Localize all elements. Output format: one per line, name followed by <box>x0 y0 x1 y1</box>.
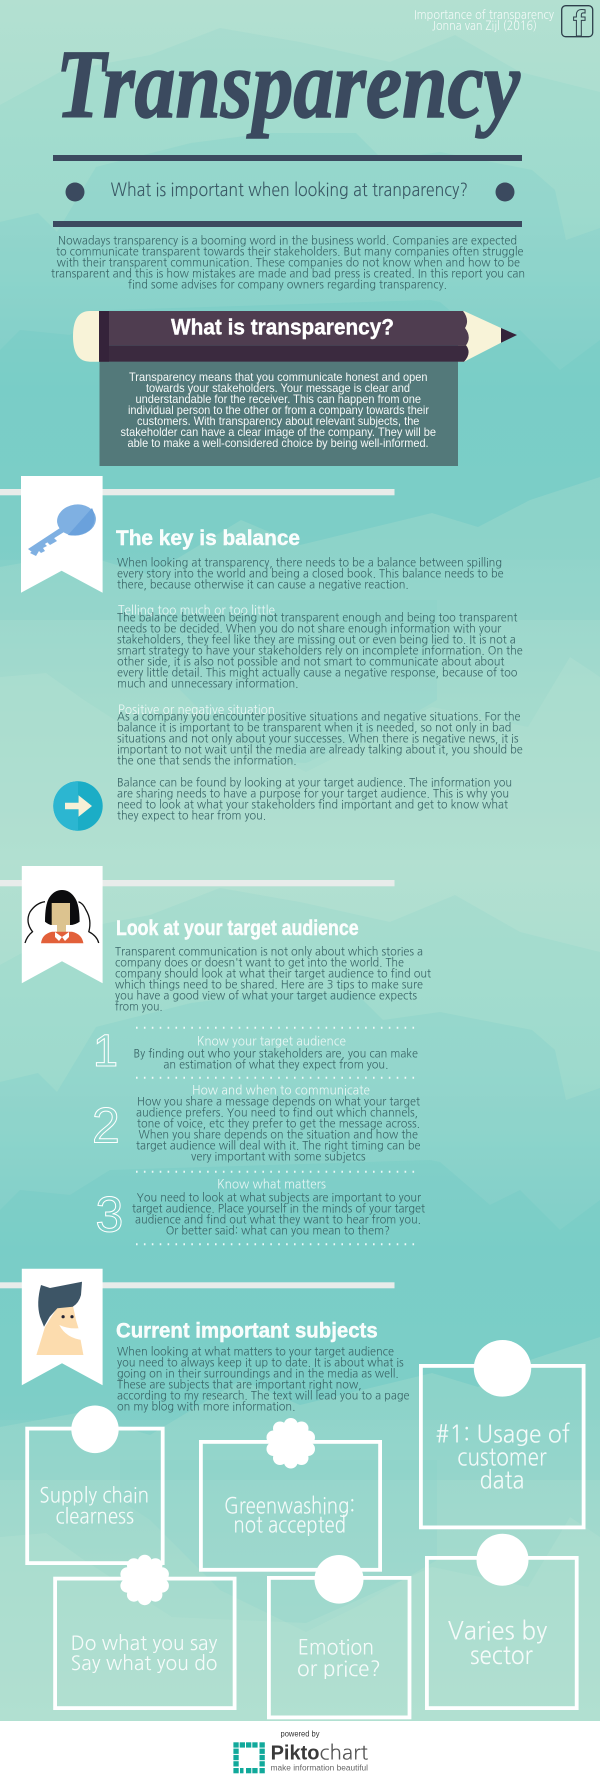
paragraph: telling too much: every little detail. This might actually cause a negative response, because of too <box>117 667 517 679</box>
tip 2: When you share depends on the situation and how the <box>138 1128 418 1140</box>
card: do what you say: Say what you do <box>71 1653 217 1673</box>
definition text: stakeholder can have a clear image of the company. They will be <box>120 425 436 439</box>
intro paragraph <box>115 946 432 1013</box>
tip 2: target audience will deal with it. The right timing can be <box>136 1139 420 1151</box>
paragraph: telling too much: other side, it is also not possible and not smart to communicate about about <box>117 656 505 668</box>
card: usage of customer data <box>421 1340 584 1527</box>
icon: arrow circle <box>53 781 103 831</box>
card: supply chain <box>27 1406 163 1563</box>
icon: key <box>28 502 98 556</box>
credit text: Jonna van Zijl (2016) <box>432 19 537 33</box>
number 3: 3 <box>96 1186 123 1242</box>
intro paragraph: on my blog with more information. <box>117 1401 295 1413</box>
text box <box>100 362 458 466</box>
intro paragraph: company does or doesn't want to get into the world. The <box>115 957 404 969</box>
tip 1: Know your target audience <box>197 1035 346 1048</box>
tip 3: audience and find out what they want to hear from you. <box>135 1214 421 1226</box>
paragraph: positive or negative: situations and not only about your successes. When there is negative news, it is <box>117 733 518 745</box>
tip 2: How and when to communicate <box>192 1083 370 1096</box>
tip 1 <box>134 1035 418 1071</box>
paragraph: positive or negative <box>117 711 523 767</box>
icon: facebook: f <box>573 3 586 44</box>
card: greenwashing <box>201 1418 380 1570</box>
paragraph: telling too much: much and unnecessary information. <box>117 678 298 690</box>
paragraph: positive or negative: important to not wait until the media are already talking about it, you should be <box>117 744 523 756</box>
tip 3: You need to look at what subjects are important to your <box>137 1192 422 1205</box>
tip 2: How you share a message depends on what your target <box>137 1095 421 1107</box>
intro paragraph: When looking at transparency, there needs to be a balance between spilling <box>117 557 502 569</box>
card: do what you say <box>55 1555 235 1708</box>
paragraph: positive or negative: balance it is important to be transparent when it is needed, so not only in bad <box>117 722 511 734</box>
heading: What is transparency? <box>171 315 394 340</box>
wordmark: Pikto <box>271 1742 320 1764</box>
paragraph: telling too much <box>117 612 523 690</box>
tip 3: Know what matters <box>217 1177 326 1190</box>
heading: Current important subjects <box>116 1319 378 1342</box>
card: greenwashing: Greenwashing: <box>224 1495 355 1517</box>
intro paragraph: you need to always keep it up to date. It is about what is <box>117 1357 404 1369</box>
intro paragraph: which things need to be shared. Here are 3 tips to make sure <box>115 979 423 991</box>
definition text <box>120 370 436 450</box>
subtitle: What is important when looking at tranparency? <box>111 181 468 199</box>
paragraph: telling too much: stakeholders, they feel like they are missing out or even being lied to. It is not a <box>117 634 516 646</box>
intro paragraph: company should look at what their target audience to find out <box>115 968 432 980</box>
wordmark <box>271 1742 369 1773</box>
credit text <box>414 8 554 33</box>
tip 2: tone of voice, etc they prefer to get the message across. <box>137 1117 420 1129</box>
intro paragraph: going on in their surroundings and in the media as well. <box>117 1368 399 1380</box>
tip 1: By finding out who your stakeholders are, you can make <box>134 1048 418 1060</box>
tip 3: Or better said: what can you mean to them? <box>166 1225 390 1237</box>
card: varies by sector <box>427 1534 577 1708</box>
number 2: 2 <box>92 1097 120 1153</box>
paragraph: telling too much: The balance between being not transparent enough and being too transparent <box>117 612 518 624</box>
paragraph: balance <box>117 777 512 822</box>
panel: the key is balance <box>0 476 523 831</box>
paragraph: telling too much: needs to be decided. When you do not share enough information with your <box>117 623 502 635</box>
icon: man <box>36 1282 83 1355</box>
intro paragraph: every story into the world and being a closed book. This balance needs to be <box>117 568 504 580</box>
heading: The key is balance <box>116 527 300 550</box>
heading: Look at your target audience <box>116 917 359 940</box>
paragraph: balance: need to look at what your stakeholders find important and get to know what <box>117 799 509 811</box>
intro paragraph: When looking at what matters to your target audience <box>117 1346 394 1358</box>
icon: pencil <box>73 311 517 362</box>
intro paragraph <box>117 1346 410 1413</box>
tip 2 <box>136 1083 421 1163</box>
tip 2: audience prefers. You need to find out which channels, <box>136 1106 418 1118</box>
wordmark: make information beautiful <box>271 1764 368 1773</box>
wordmark: chart <box>320 1742 369 1762</box>
paragraph: balance: Balance can be found by looking at your target audience. The information you <box>117 777 512 789</box>
title rule and subtitle band <box>53 155 522 227</box>
number 1: 1 <box>93 1025 118 1076</box>
card: do what you say: Do what you say <box>71 1633 218 1653</box>
intro paragraph: from you. <box>115 1001 163 1013</box>
intro paragraph: you have a good view of what your target audience expects <box>115 990 417 1002</box>
card: greenwashing: not accepted <box>233 1515 346 1537</box>
card: supply chain: Supply chain <box>39 1485 149 1506</box>
definition text: customers. With transparency about relevant subjects, the <box>137 414 420 428</box>
intro text: find some advises for company owners regarding transparency. <box>128 279 447 291</box>
tip 1: an estimation of what they expect from you. <box>163 1059 388 1071</box>
ribbon <box>21 476 103 593</box>
intro paragraph: there, because otherwise it can cause a negative reaction. <box>117 579 409 591</box>
card: usage of customer data: #1: Usage of <box>436 1423 570 1447</box>
card: varies by sector: sector <box>470 1643 534 1668</box>
subheading: positive or negative: Positive or negative situation <box>118 703 275 716</box>
ribbon <box>22 866 103 983</box>
paragraph: positive or negative: As a company you encounter positive situations and negative situations. For the <box>117 711 520 723</box>
intro text: to communicate transparent towards their stakeholders. But many companies often struggle <box>56 245 524 257</box>
definition text: understandable for the receiver. This can happen from one <box>136 392 421 406</box>
paragraph: balance: they expect to hear from you. <box>117 810 266 822</box>
intro text: Nowadays transparency is a booming word in the business world. Companies are expected <box>58 234 517 246</box>
intro paragraph: Transparent communication is not only about which stories a <box>115 946 423 958</box>
intro paragraph <box>117 557 504 591</box>
definition text: towards your stakeholders. Your message is clear and <box>146 381 410 395</box>
card: usage of customer data: data <box>480 1469 524 1493</box>
definition text: Transparency means that you communicate honest and open <box>129 370 428 384</box>
ribbon <box>22 1269 103 1385</box>
card: usage of customer data: customer <box>457 1446 547 1470</box>
subheading: telling too much: Telling too much or too little <box>118 603 275 616</box>
intro text: transparent and this is how mistakes are made and bad press is created. In this report you can <box>51 267 525 279</box>
footer: piktochart <box>0 1722 600 1782</box>
title: Transparency <box>56 31 520 139</box>
paragraph: balance: are sharing needs to have a purpose for your target audience. This is why you <box>117 788 509 800</box>
intro paragraph: according to my research. The text will lead you to a page <box>117 1390 410 1402</box>
definition text: able to make a well-considered choice by being well-informed. <box>128 436 429 450</box>
icon: facebook <box>562 3 593 44</box>
tip 3: target audience. Place yourself in the minds of your target <box>132 1203 426 1215</box>
card: emotion or price: Emotion <box>298 1637 374 1658</box>
panel: target audience <box>0 866 432 1244</box>
icon: logo <box>233 1742 265 1773</box>
credit text: Importance of transparency <box>414 8 554 21</box>
powered by: powered by <box>280 1730 320 1739</box>
tip 3 <box>132 1177 426 1237</box>
icon: person <box>25 890 99 943</box>
paragraph: positive or negative: the one that sends the information. <box>117 755 297 767</box>
intro text: with their transparent communication. These companies do not know when and how to be <box>57 256 520 268</box>
card: emotion or price <box>269 1555 410 1717</box>
card: emotion or price: or price? <box>297 1659 381 1680</box>
intro text <box>51 234 525 291</box>
card: supply chain: clearness <box>56 1506 134 1527</box>
intro paragraph: These are subjects that are important right now, <box>117 1379 362 1392</box>
tip 2: very important with some subjetcs <box>191 1150 366 1163</box>
panel: what is transparency <box>73 311 517 466</box>
paragraph: telling too much: smart strategy to have your stakeholders rely on incomplete information. On the <box>117 645 523 657</box>
card: varies by sector: Varies by <box>448 1618 548 1643</box>
panel: current important subjects <box>0 1269 584 1717</box>
definition text: individual person to the other or from a company towards their <box>128 403 429 417</box>
